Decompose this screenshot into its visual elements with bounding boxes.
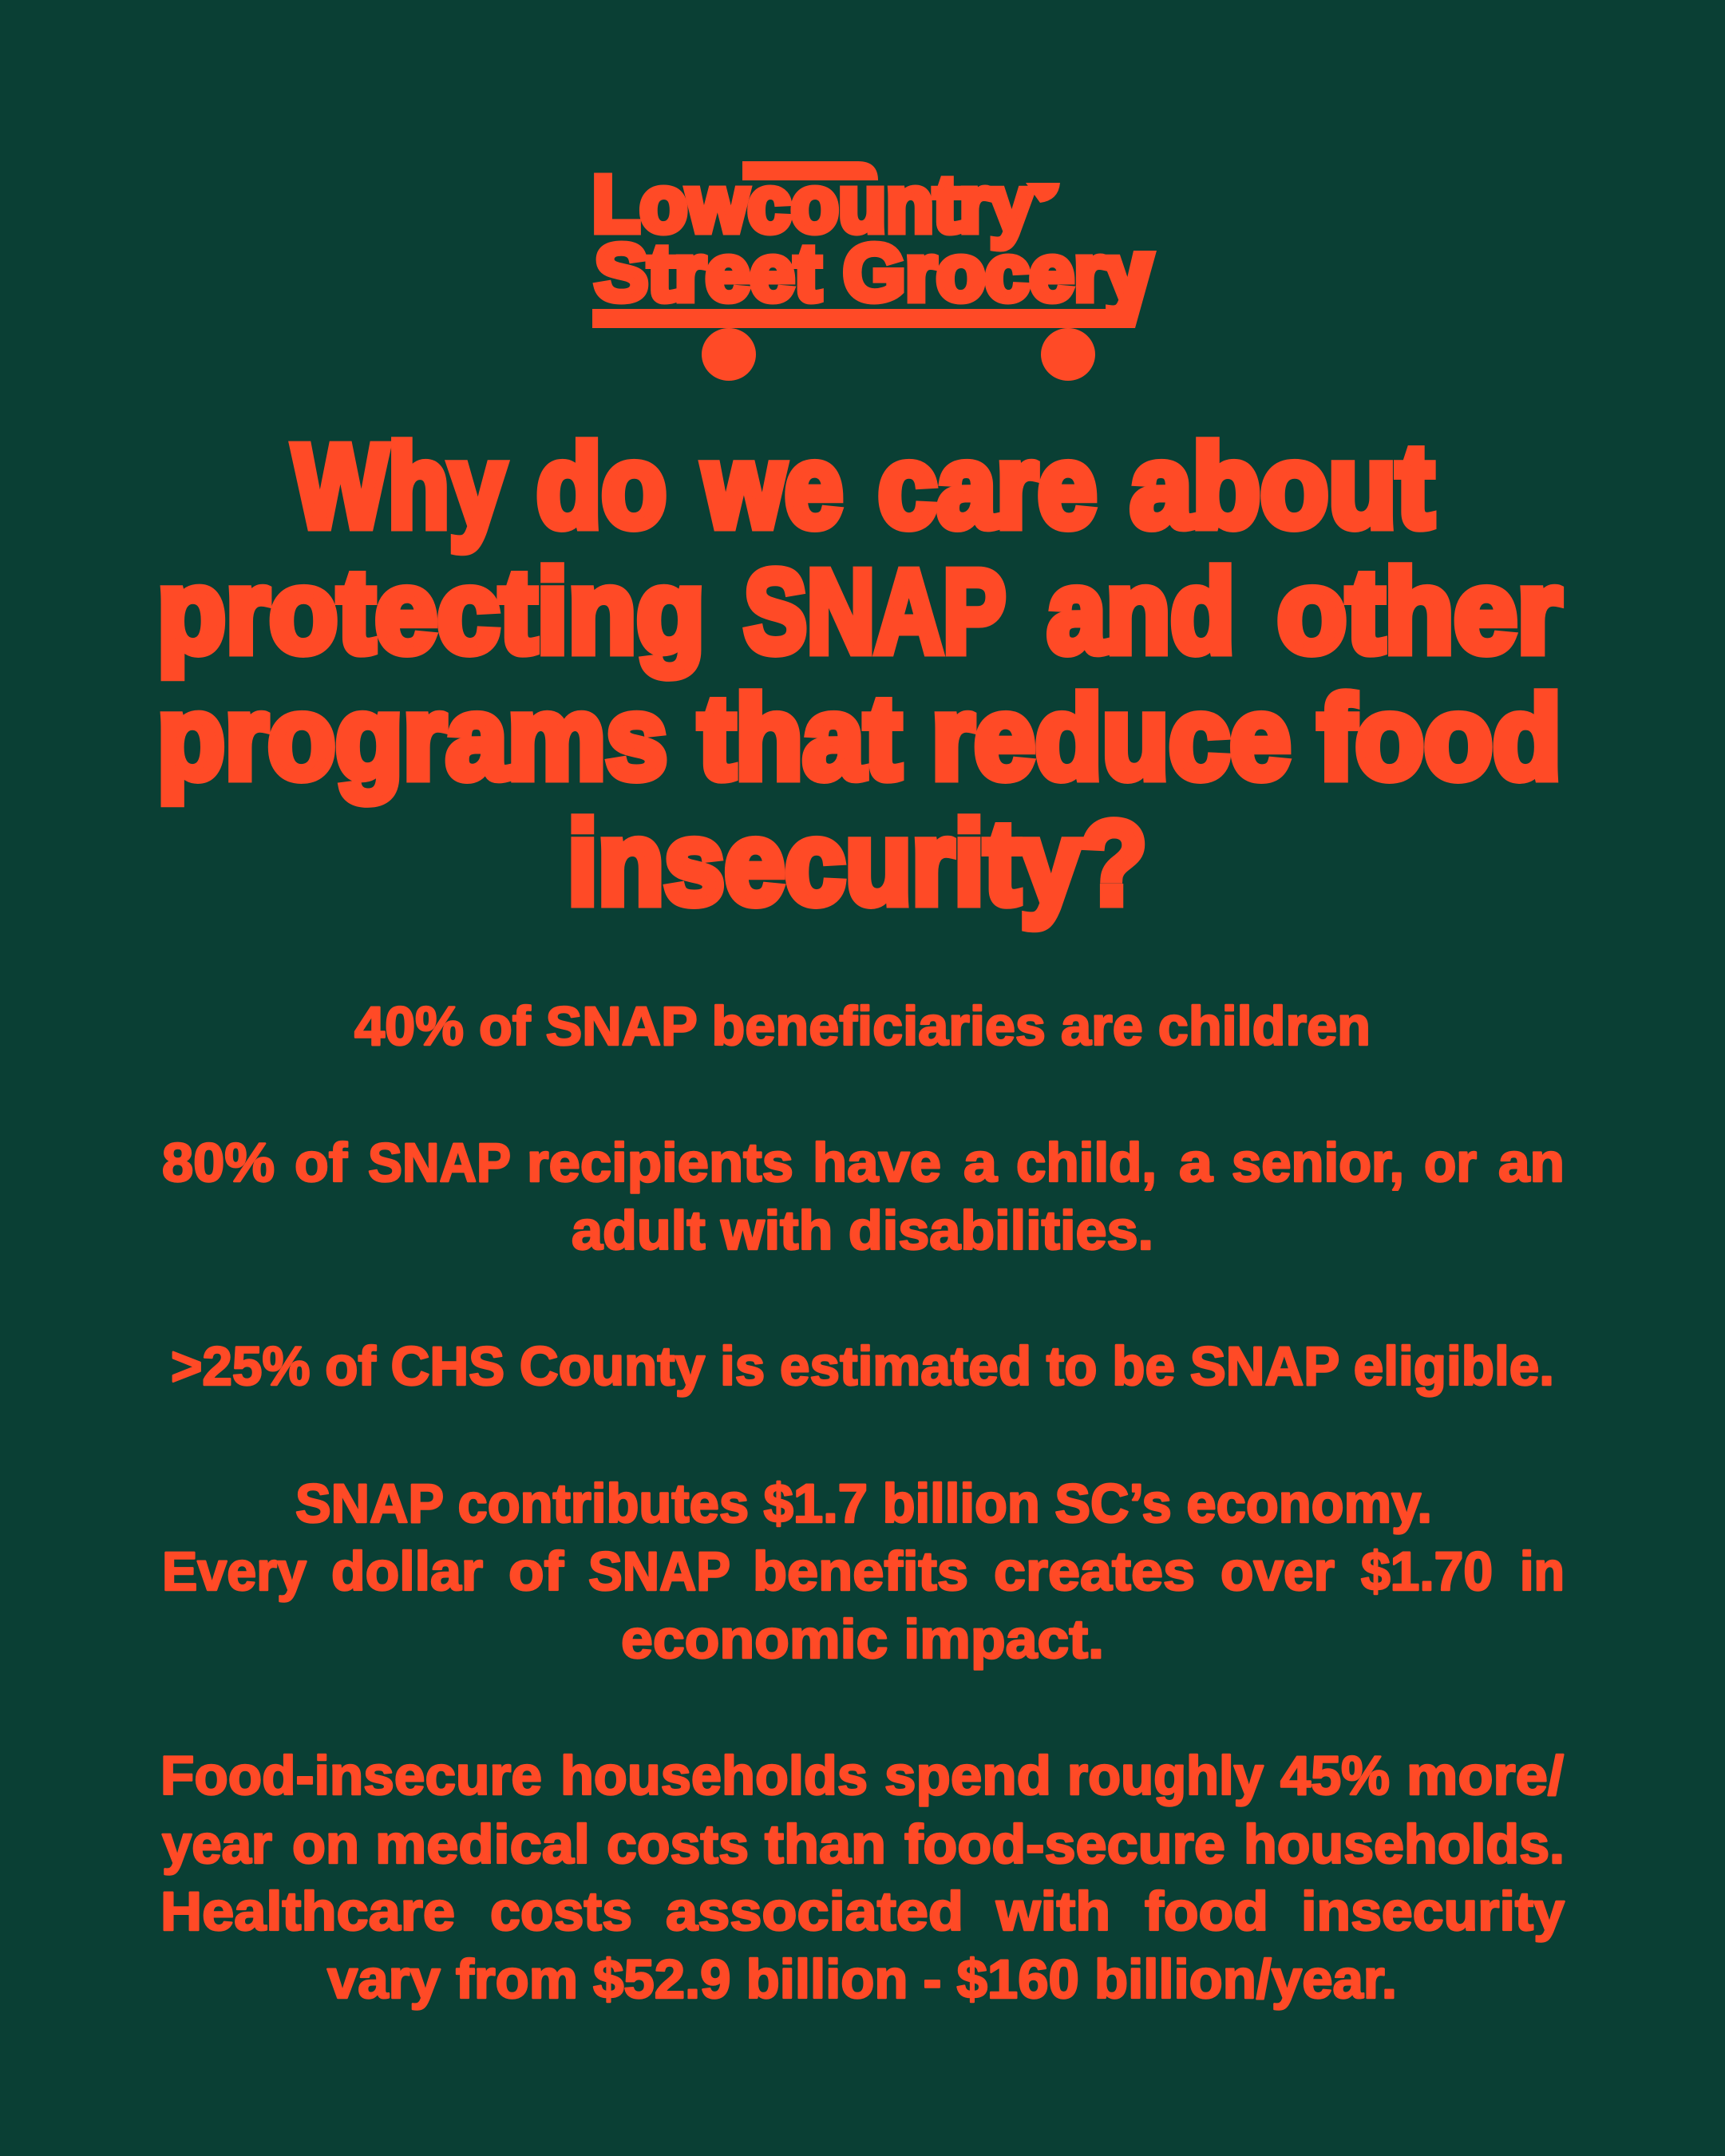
economy line 2: SNAP bbox=[588, 1541, 730, 1602]
economy line 2: creates bbox=[994, 1541, 1195, 1602]
economy line 2: $1.70 bbox=[1361, 1541, 1493, 1602]
medical line 3 bbox=[160, 1881, 1565, 1942]
medical line 3: food bbox=[1145, 1881, 1268, 1942]
title line 1: about bbox=[1130, 421, 1434, 552]
recipients line 1: SNAP bbox=[368, 1132, 511, 1193]
logo wordmark: Street Grocery: Street Grocery bbox=[595, 228, 1149, 318]
title line 1: care bbox=[878, 421, 1097, 552]
medical line 2 bbox=[162, 1814, 1565, 1875]
economy line 2 bbox=[162, 1541, 1565, 1602]
stat: economy bbox=[162, 1473, 1565, 1670]
stat: recipients bbox=[162, 1132, 1565, 1261]
medical line 3: with bbox=[995, 1881, 1110, 1942]
logo: cart handle bbox=[742, 161, 878, 180]
medical line 3: costs bbox=[490, 1881, 632, 1942]
recipients line 1: senior, bbox=[1232, 1132, 1404, 1193]
medical line 1: 45% bbox=[1280, 1745, 1390, 1806]
economy line 2: Every bbox=[162, 1541, 307, 1602]
medical line 3: Healthcare bbox=[160, 1881, 455, 1942]
title line 2: and bbox=[1047, 546, 1235, 678]
title line 3: programs bbox=[157, 672, 667, 804]
recipients line 1 bbox=[162, 1132, 1565, 1193]
title bbox=[157, 421, 1561, 929]
recipients line 1: recipients bbox=[527, 1132, 793, 1193]
title line 1 bbox=[293, 421, 1434, 552]
stat: county eligibility: >25% of CHS County is estimated to be SNAP eligible. bbox=[171, 1335, 1554, 1397]
economy line 2: of bbox=[508, 1541, 564, 1602]
title line 2 bbox=[157, 546, 1561, 678]
recipients line 1: a bbox=[963, 1132, 998, 1193]
logo: Lowcountry Street Grocery cart bbox=[592, 160, 1157, 381]
recipients line 1: have bbox=[813, 1132, 941, 1193]
title line 3: that bbox=[698, 672, 901, 804]
economy line 1: SNAP contributes $1.7 billion SC’s economy. bbox=[295, 1473, 1432, 1534]
medical line 1: spend bbox=[884, 1745, 1051, 1806]
medical line 1: Food-insecure bbox=[160, 1745, 542, 1806]
recipients line 1: an bbox=[1498, 1132, 1565, 1193]
title line 4: insecurity? bbox=[568, 797, 1147, 929]
medical line 3: associated bbox=[666, 1881, 963, 1942]
stat: children: 40% of SNAP beneficiaries are children bbox=[354, 995, 1371, 1057]
medical line 1 bbox=[160, 1745, 1564, 1806]
medical line 2: year bbox=[162, 1814, 272, 1875]
economy line 2: in bbox=[1520, 1541, 1565, 1602]
title line 1: Why bbox=[293, 421, 505, 552]
logo: left wheel bbox=[702, 328, 756, 381]
logo: right wheel bbox=[1041, 328, 1095, 381]
title line 3: reduce bbox=[932, 672, 1291, 804]
medical line 2: food-secure bbox=[904, 1814, 1225, 1875]
title line 2: other bbox=[1277, 546, 1561, 678]
recipients line 1: or bbox=[1424, 1132, 1477, 1193]
medical line 2: households. bbox=[1244, 1814, 1565, 1875]
medical line 2: medical bbox=[375, 1814, 590, 1875]
title line 1: we bbox=[702, 421, 843, 552]
medical line 1: more/ bbox=[1407, 1745, 1564, 1806]
economy line 2: benefits bbox=[753, 1541, 968, 1602]
title line 3 bbox=[157, 672, 1561, 804]
recipients line 1: of bbox=[295, 1132, 348, 1193]
recipients line 1: 80% bbox=[162, 1132, 275, 1193]
title line 2: protecting bbox=[157, 546, 705, 678]
recipients line 2: adult with disabilities. bbox=[572, 1200, 1153, 1261]
stat: medical costs bbox=[160, 1745, 1565, 2010]
medical line 2: on bbox=[292, 1814, 359, 1875]
title line 1: do bbox=[536, 421, 667, 552]
medical line 2: than bbox=[765, 1814, 886, 1875]
title line 2: SNAP bbox=[744, 546, 1006, 678]
logo wordmark: Lowcountry: Lowcountry bbox=[592, 160, 1033, 249]
economy line 3: economic impact. bbox=[621, 1608, 1104, 1670]
medical line 4: vary from $52.9 billion - $160 billion/year. bbox=[327, 1948, 1397, 2010]
recipients line 1: a bbox=[1179, 1132, 1213, 1193]
medical line 2: costs bbox=[607, 1814, 749, 1875]
logo: y flag bbox=[1026, 183, 1060, 203]
medical line 1: households bbox=[560, 1745, 868, 1806]
title line 3: food bbox=[1318, 672, 1561, 804]
economy line 2: over bbox=[1221, 1541, 1335, 1602]
economy line 2: dollar bbox=[331, 1541, 483, 1602]
medical line 1: roughly bbox=[1067, 1745, 1264, 1806]
logo: cart bar bbox=[592, 251, 1157, 328]
medical line 3: insecurity bbox=[1301, 1881, 1565, 1942]
recipients line 1: child, bbox=[1016, 1132, 1157, 1193]
